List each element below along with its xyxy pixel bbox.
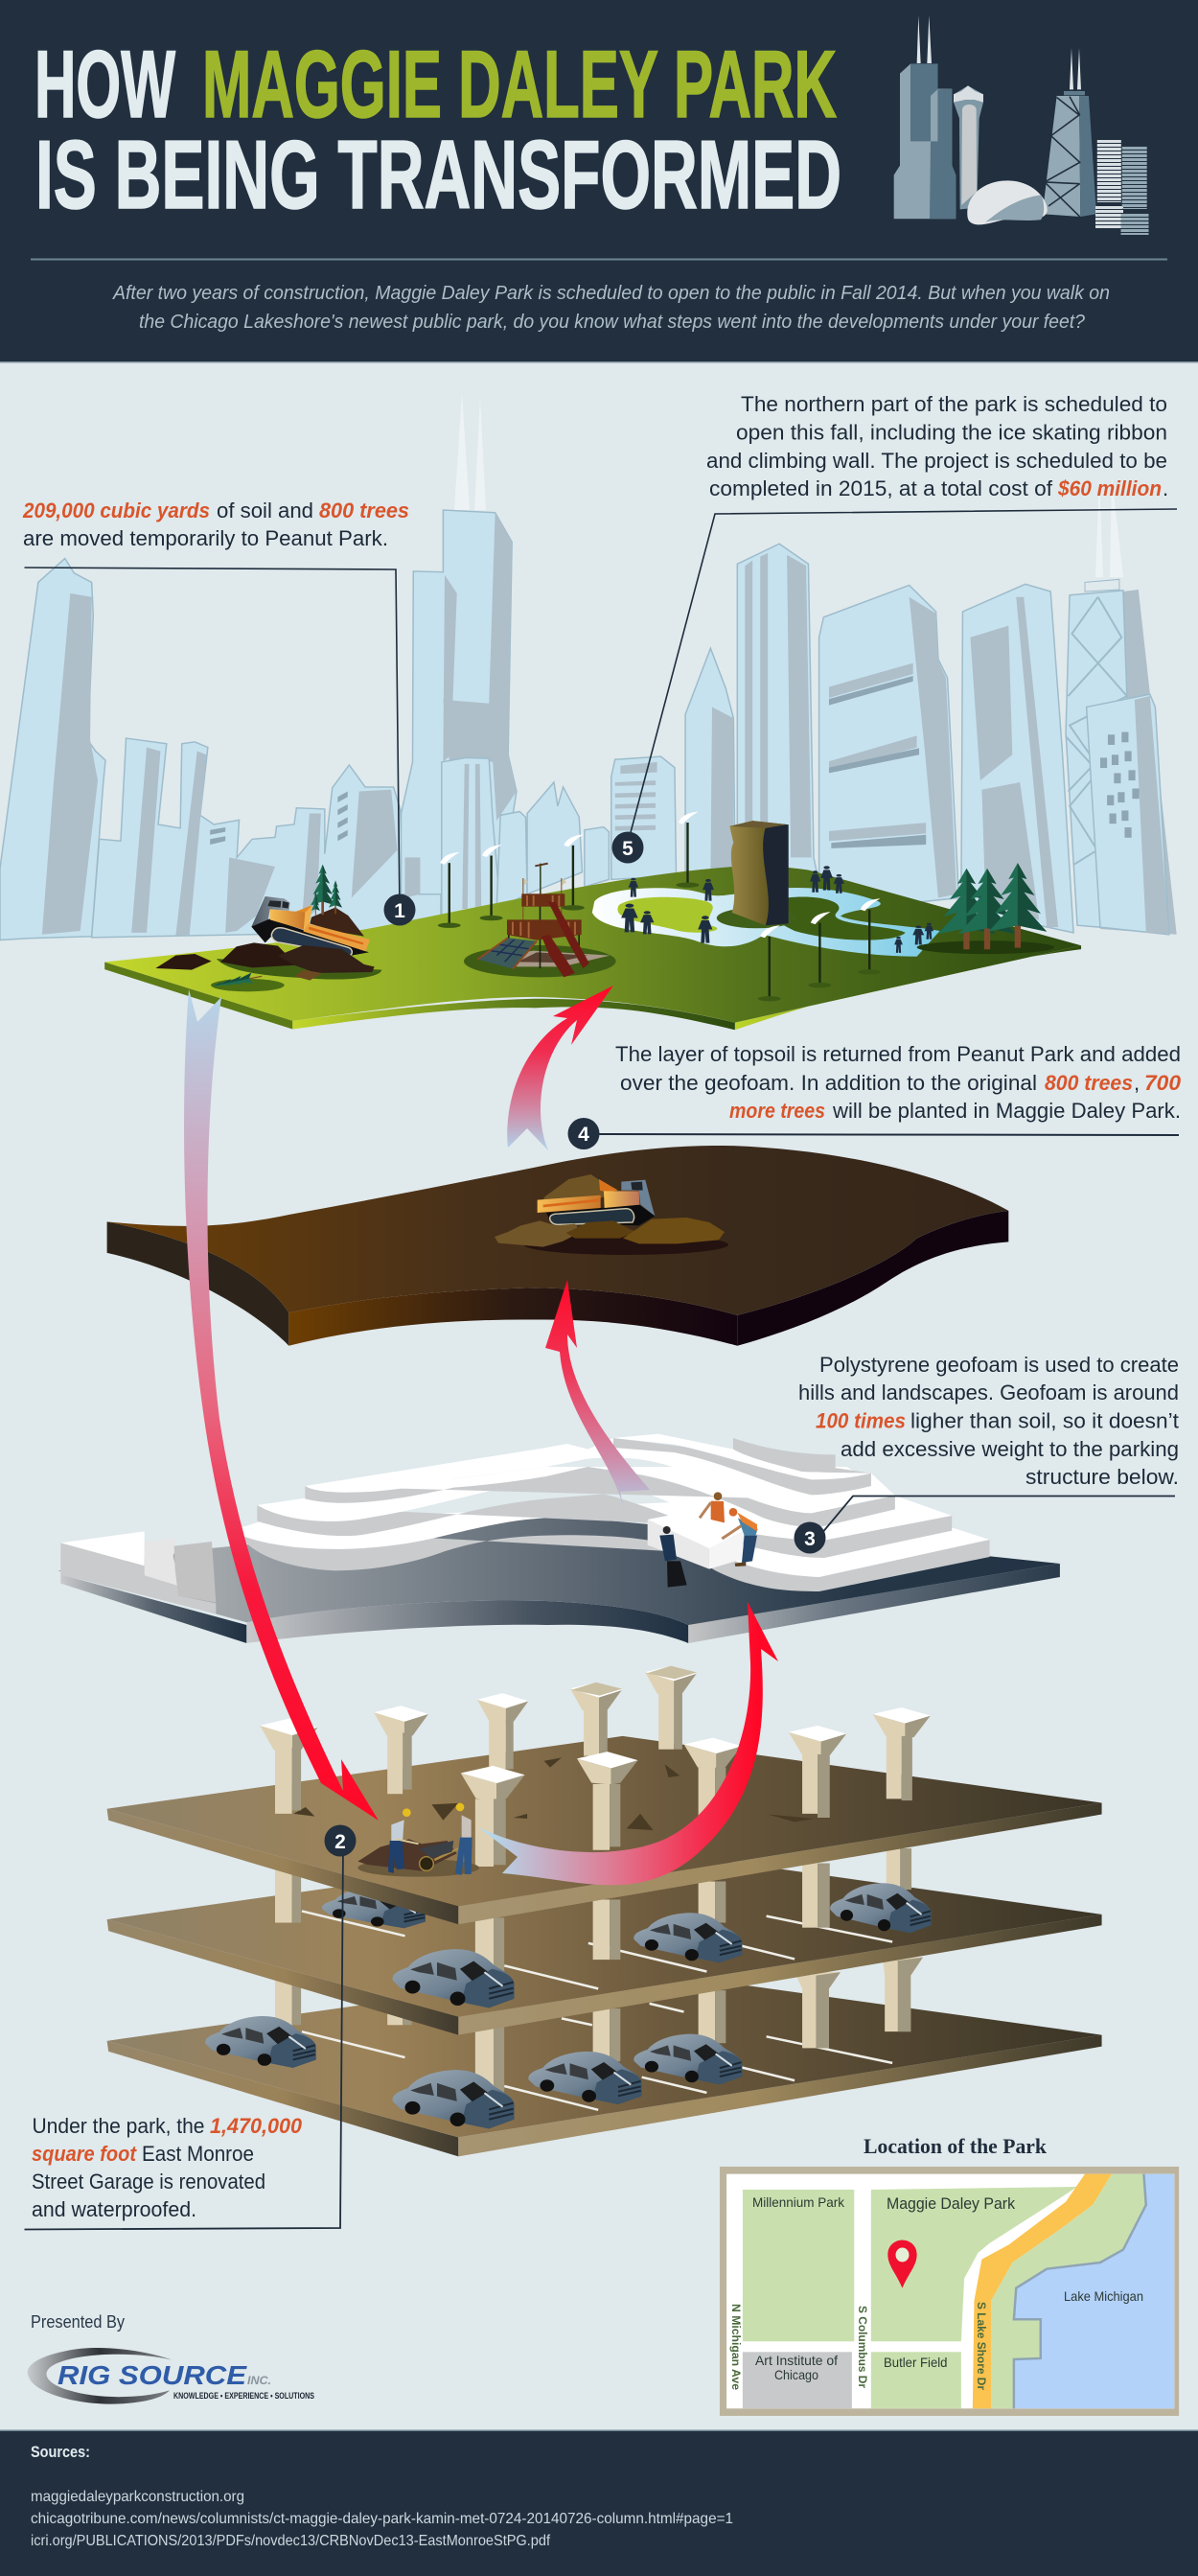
badge 1: 1 xyxy=(394,900,405,922)
truck dump bed xyxy=(294,905,311,918)
dirt patches on deck xyxy=(293,1757,814,1830)
top level columns xyxy=(260,1666,931,1867)
foam tier 1 xyxy=(242,1493,990,1591)
slab front side xyxy=(246,1600,688,1643)
callout 3: geofoam text: add excessive weight to the parking xyxy=(841,1437,1179,1461)
callout 4: topsoil text: will be planted in Maggie Daley Park. xyxy=(832,1099,1181,1123)
callout 3: geofoam text: 100 times xyxy=(816,1409,906,1432)
leader line: callout 5 xyxy=(630,509,1177,836)
header band xyxy=(0,0,1198,362)
sources: icri.org/PUBLICATIONS/2013/PDFs/novdec13/CRBNovDec13-EastMonroeStPG.pdf xyxy=(31,2533,551,2549)
dirt mound xyxy=(357,1839,479,1877)
dump truck with soil and trees xyxy=(155,865,381,991)
badge 3 xyxy=(794,1522,826,1553)
park lawn xyxy=(104,866,1081,1023)
trees in bed xyxy=(311,865,334,915)
lamp posts xyxy=(438,812,881,1001)
callout 4: topsoil text: over the geofoam. In addition to the original xyxy=(620,1071,1037,1095)
location map: S Columbus Dr xyxy=(856,2306,869,2388)
arrow: soil up to park xyxy=(507,986,613,1150)
title: MAGGIE DALEY PARK xyxy=(202,31,837,137)
callout 4: topsoil text xyxy=(615,1042,1182,1123)
callout 2: garage text: Under the park, the xyxy=(33,2114,205,2138)
callout 4: topsoil text: 700 xyxy=(1144,1071,1182,1095)
wheelbarrow xyxy=(419,1841,462,1870)
intro text xyxy=(112,283,1110,333)
leader line: callout 3 xyxy=(821,1496,1175,1534)
intro text: After two years of construction, Maggie Daley Park is scheduled to open to the public in Fall 2014. But when you walk on xyxy=(112,283,1110,304)
truck on soil xyxy=(495,1174,728,1255)
layer 4: soil slab xyxy=(107,1146,1008,1346)
green parks xyxy=(743,2174,1146,2408)
Rig Source logo: RIG SOURCE xyxy=(58,2360,247,2390)
art institute block xyxy=(743,2352,852,2408)
middle level cars xyxy=(322,1883,931,2007)
callout 1: soil and trees text: 800 trees xyxy=(319,499,409,522)
badge 3: 3 xyxy=(804,1528,816,1550)
callout 2: garage text: and waterproofed. xyxy=(32,2197,196,2221)
callout 4: topsoil text: 800 trees xyxy=(1045,1071,1133,1095)
badge 2 xyxy=(324,1825,357,1856)
badge 1 xyxy=(383,893,416,926)
location map: Chicago xyxy=(774,2367,818,2382)
callout 5: northern part text: and climbing wall. The project is scheduled to be xyxy=(706,449,1167,473)
playground tower and slides xyxy=(464,864,616,977)
callout 5: northern part text: open this fall, including the ice skating ribbon xyxy=(736,420,1167,445)
slab top xyxy=(58,1515,1060,1625)
leader line: callout 2 xyxy=(25,1845,343,2230)
foam tier 4 xyxy=(613,1434,871,1495)
sources: chicagotribune.com/news/columnists/ct-maggie-daley-park-kamin-met-0724-20140726-column.html#page=1 xyxy=(31,2511,733,2527)
location map: Lake Michigan xyxy=(1064,2288,1143,2304)
callout 1: soil and trees text: are moved temporarily to Peanut Park. xyxy=(23,526,388,550)
callout 3: geofoam text: hills and landscapes. Geofoam is around xyxy=(798,1381,1179,1404)
Rig Source logo xyxy=(28,2348,314,2404)
ground shadows xyxy=(217,959,381,980)
badge 4 xyxy=(567,1118,600,1149)
trees xyxy=(917,863,1054,954)
middle deck xyxy=(107,1846,1102,2035)
Rig Source logo: INC. xyxy=(247,2374,271,2387)
foam tier 5 xyxy=(733,1438,836,1473)
badge 2: 2 xyxy=(334,1831,346,1853)
sources xyxy=(31,2443,733,2549)
park visitors xyxy=(621,866,933,953)
callout 2: garage text xyxy=(32,2114,303,2221)
soil heaps xyxy=(155,954,212,970)
soil front side xyxy=(288,1288,737,1346)
icon: Chicago skyline in header xyxy=(894,15,1135,235)
lake xyxy=(1014,2174,1174,2408)
sources: Sources: xyxy=(31,2443,90,2461)
title xyxy=(35,31,841,229)
workers placing geofoam block xyxy=(648,1492,758,1588)
workers with wheelbarrow on deck xyxy=(357,1803,479,1877)
badge 5: 5 xyxy=(622,838,634,860)
city skyline backdrop xyxy=(0,393,1177,940)
sources: maggiedaleyparkconstruction.org xyxy=(31,2489,244,2505)
park side faces xyxy=(104,945,1081,1030)
bottom level columns xyxy=(275,1958,923,2093)
climbing wall xyxy=(717,821,796,928)
foam tier 2 xyxy=(257,1467,952,1558)
location map: Butler Field xyxy=(884,2355,947,2370)
location map xyxy=(720,2167,1179,2416)
callout 3: geofoam text: ligher than soil, so it doesn’t xyxy=(910,1409,1179,1432)
worker left xyxy=(659,1526,687,1588)
callout 1: soil and trees text: of soil and xyxy=(217,499,313,522)
fallen tree xyxy=(212,971,263,991)
soil top surface xyxy=(107,1146,1008,1315)
top deck xyxy=(107,1736,1102,1924)
callout 5: northern part text xyxy=(706,392,1168,500)
location map: Maggie Daley Park xyxy=(887,2194,1015,2213)
location map: Art Institute of xyxy=(755,2353,838,2368)
footer band xyxy=(0,2429,1198,2576)
divider line xyxy=(31,259,1167,261)
presented by label: Presented By xyxy=(31,2312,125,2332)
title: HOW xyxy=(35,31,175,137)
soil left side xyxy=(107,1221,288,1346)
callout 3: geofoam text: Polystyrene geofoam is used to create xyxy=(819,1353,1179,1377)
worker rear xyxy=(700,1492,725,1522)
callout 3: geofoam text: structure below. xyxy=(1025,1465,1179,1489)
worker with shovel xyxy=(388,1808,419,1873)
slab right side xyxy=(688,1564,1060,1643)
leader line: callout 4 xyxy=(584,1134,1179,1135)
map pin xyxy=(887,2240,917,2288)
intro text: the Chicago Lakeshore's newest public park, do you know what steps went into the developments under your feet? xyxy=(139,312,1086,333)
Rig Source logo: KNOWLEDGE • EXPERIENCE • SOLUTIONS xyxy=(173,2391,314,2401)
foam left block xyxy=(60,1531,216,1613)
callout 1: soil and trees text: 209,000 cubic yards xyxy=(22,499,210,522)
callout 5: northern part text: completed in 2015, at a total cost of xyxy=(709,476,1053,500)
bottom level cars xyxy=(205,2016,742,2128)
leader line: callout 1 xyxy=(25,568,400,910)
callout 2: garage text: square foot xyxy=(32,2142,138,2166)
arrow: geofoam up to soil xyxy=(545,1280,650,1517)
slab left side xyxy=(60,1574,246,1643)
worker with barrow xyxy=(455,1803,472,1875)
ice skating ribbon pond xyxy=(592,888,940,957)
badge 4: 4 xyxy=(578,1124,589,1146)
location map: N Michigan Ave xyxy=(729,2304,743,2390)
map title: Location of the Park xyxy=(864,2134,1048,2158)
truck track xyxy=(271,928,352,956)
callout 5: northern part text: $60 million xyxy=(1057,476,1162,500)
callout 1: soil and trees text xyxy=(22,499,409,550)
badge 5 xyxy=(611,832,644,863)
soil right side xyxy=(737,1211,1008,1346)
bottom deck xyxy=(107,1968,1102,2156)
callout 2: garage text: East Monroe xyxy=(142,2142,254,2166)
arrow: soil to Peanut Park and down to garage xyxy=(184,989,379,1821)
layer 3: geofoam on dark slab xyxy=(58,1434,1060,1643)
lake shore drive road xyxy=(973,2174,1112,2408)
foam block xyxy=(648,1513,745,1569)
foam tier 3 xyxy=(305,1438,895,1527)
location map: Millennium Park xyxy=(752,2194,845,2210)
callout 4: topsoil text: , xyxy=(1134,1071,1140,1095)
worker right xyxy=(722,1508,758,1566)
callout 5: northern part text: The northern part of the park is scheduled to xyxy=(741,392,1167,416)
callout 3: geofoam text xyxy=(798,1353,1179,1489)
arrow: garage up to geofoam xyxy=(478,1602,778,1885)
truck cab xyxy=(251,896,290,928)
location map: S Lake Shore Dr xyxy=(975,2302,988,2390)
callout 2: garage text: 1,470,000 xyxy=(210,2114,303,2138)
callout 5: northern part text: . xyxy=(1163,476,1168,500)
middle level columns xyxy=(275,1848,911,1984)
layer 5: finished green park xyxy=(104,812,1081,1030)
callout 2: garage text: Street Garage is renovated xyxy=(32,2170,265,2193)
callout 4: topsoil text: more trees xyxy=(729,1099,825,1123)
layer 2: parking garage xyxy=(107,1666,1102,2156)
callout 4: topsoil text: The layer of topsoil is returned from Peanut Park and added xyxy=(615,1042,1181,1066)
